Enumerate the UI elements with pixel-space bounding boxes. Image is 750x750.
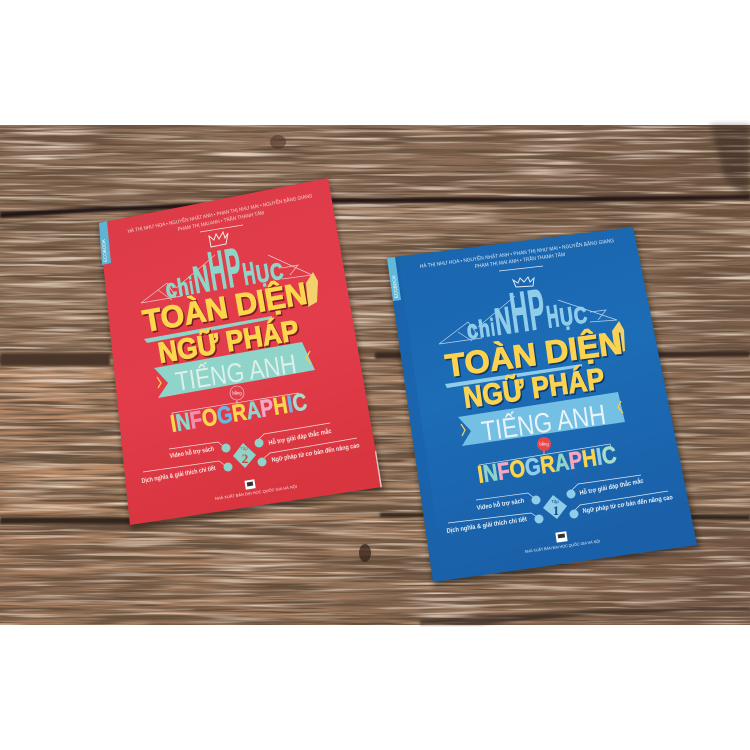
heading: chinh phục: i [187, 273, 196, 300]
spine label: ECOBOOK [391, 274, 399, 298]
heading: chinh phục: H [240, 255, 258, 292]
volume badge [233, 443, 256, 468]
feature: grammar [258, 438, 360, 466]
background: wooden boards photo [0, 125, 750, 625]
spine label [99, 221, 111, 265]
heading: chinh phục: N [492, 300, 514, 344]
connector frame [172, 393, 299, 417]
authors: PHẠM THỊ MAI ANH • TRẦN THANH TÂM [177, 209, 265, 233]
feature: grammar [570, 491, 673, 518]
roof outline [439, 296, 617, 344]
feature: translation: Dịch nghĩa & giải thích chi tiết [446, 515, 528, 535]
heading: toàn diện: TOÀN DIỆN [141, 276, 311, 340]
heading: chinh phục: P [524, 277, 549, 343]
heading: ngữ pháp: NGỮ PHÁP [461, 362, 607, 415]
blue underline [445, 364, 582, 388]
publisher name: NHÀ XUẤT BẢN ĐẠI HỌC QUỐC GIA HÀ NỘI [524, 538, 600, 554]
red cover [99, 178, 382, 525]
heading: chinh phục: Ụ [254, 259, 272, 289]
heading: ngữ pháp: NGỮ PHÁP [156, 313, 301, 370]
bằng badge [230, 386, 244, 400]
authors: HÀ THỊ NHƯ HOA • NGUYỄN NHẬT ANH • PHAN THỊ NHƯ MAI • NGUYỄN BẰNG GIANG [127, 191, 313, 235]
publisher logo [244, 479, 256, 490]
bằng badge: bằng [539, 442, 549, 446]
feature: support [254, 423, 333, 448]
heading: chinh phục: C [572, 301, 589, 329]
chevrons [461, 401, 623, 436]
feature: support: Hỗ trợ giải đáp thắc mắc [268, 426, 333, 447]
publisher logo [555, 531, 568, 543]
chevrons [157, 351, 311, 388]
heading: ngữ pháp: NGỮ PHÁP [157, 314, 303, 371]
feature: translation: Dịch nghĩa & giải thích chi tiết [141, 464, 217, 485]
feature: grammar: Ngữ pháp từ cơ bản đến nâng cao [582, 493, 673, 515]
ribbon [154, 342, 315, 398]
icon: Big Ben tower [306, 272, 318, 307]
shadow under red book [99, 178, 384, 530]
infographic wordmark: INFOGRAPHIC [476, 441, 618, 489]
connector frame [479, 444, 611, 469]
heading: chinh phục [461, 272, 590, 352]
heading: chinh phục [159, 229, 286, 310]
volume badge: 2 [242, 451, 248, 466]
volume badge: 1 [553, 503, 559, 518]
heading: toàn diện: TOÀN DIỆN [140, 275, 310, 339]
heading: toàn diện: TOÀN DIỆN [445, 326, 626, 385]
heading: chinh phục: H [204, 238, 230, 302]
teal underline [144, 316, 272, 343]
feature: video: Video hỗ trợ sách [169, 444, 215, 460]
heading: chinh phục: i [489, 314, 497, 342]
heading: chinh phục: c [465, 314, 480, 345]
feature: video: Video hỗ trợ sách [476, 496, 525, 512]
roof outline [141, 255, 312, 303]
heading: chinh phục: c [163, 273, 179, 304]
heading: chinh phục: C [268, 258, 285, 285]
blue cover [387, 227, 697, 582]
infographic wordmark: INFOGRAPHIC [169, 389, 309, 438]
heading: chinh phục: P [221, 236, 246, 299]
publisher name: NHÀ XUẤT BẢN ĐẠI HỌC QUỐC GIA HÀ NỘI [214, 484, 297, 501]
heading: chinh phục: H [506, 280, 532, 345]
icon: Big Ben tower [612, 321, 625, 354]
red book: Tập 2 [99, 178, 382, 525]
feature: support [566, 475, 645, 498]
features [141, 423, 360, 485]
heading: chinh phục: h [477, 315, 492, 343]
bằng badge [537, 437, 551, 451]
spine crease [387, 257, 444, 582]
heading: chinh phục: Ụ [558, 302, 575, 332]
shadow under blue book [387, 227, 700, 587]
authors: PHẠM THỊ MAI ANH • TRẦN THANH TÂM [474, 251, 565, 270]
ribbon text: tiếng anh: TIẾNG ANH [173, 348, 299, 397]
volume badge: Tập [240, 446, 248, 451]
heading: toàn diện: TOÀN DIỆN [443, 324, 624, 384]
heading: chinh phục: N [190, 258, 213, 302]
heading: chinh phục: h [175, 273, 191, 302]
heading: chinh phục: H [544, 298, 561, 335]
ribbon text: tiếng anh: TIẾNG ANH [480, 399, 608, 447]
crown icon [209, 232, 228, 247]
ribbon [458, 392, 625, 446]
volume badge: Tập [551, 499, 559, 504]
bằng badge: bằng [232, 390, 242, 396]
feature: support: Hỗ trợ giải đáp thắc mắc [579, 476, 645, 497]
feature: grammar: Ngữ pháp từ cơ bản đến nâng cao [271, 441, 360, 464]
heading: ngữ pháp: NGỮ PHÁP [463, 363, 608, 416]
spine label [387, 257, 401, 301]
blue book: Tập 1 [387, 227, 697, 582]
spine label: ECOBOOK [101, 238, 108, 262]
crown icon [513, 277, 534, 287]
authors: HÀ THỊ NHƯ HOA • NGUYỄN NHẬT ANH • PHAN THỊ NHƯ MAI • NGUYỄN BẰNG GIANG [419, 236, 615, 270]
features [446, 475, 673, 535]
volume badge [543, 495, 567, 519]
page edge [375, 450, 382, 488]
